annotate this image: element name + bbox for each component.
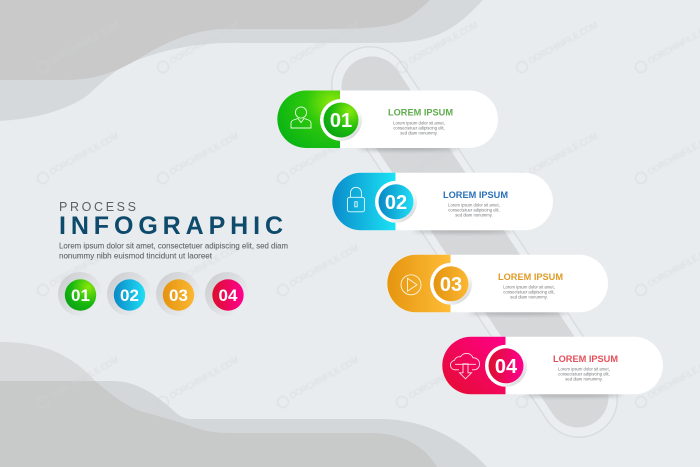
watermarks: OORCHINFILE.COM bbox=[407, 355, 479, 401]
card 1: consectetuer adipiscing elit, bbox=[393, 125, 445, 130]
watermarks: OORCHINFILE.COM bbox=[168, 243, 240, 289]
card 1: 01 bbox=[330, 110, 352, 132]
card 3: Lorem ipsum dolor sit amet, bbox=[503, 285, 555, 290]
card 3: 03 bbox=[440, 274, 462, 296]
icon: padlock bbox=[348, 187, 364, 212]
card 2: 02 bbox=[385, 192, 407, 214]
card 4: LOREM IPSUM bbox=[553, 354, 618, 365]
intro text bbox=[59, 240, 288, 260]
diagonal capsule behind cards bbox=[370, 85, 579, 399]
number badges row: 02 bbox=[120, 286, 139, 305]
watermarks: OORCHINFILE.COM bbox=[168, 20, 240, 66]
number badges row: 04 bbox=[219, 286, 238, 305]
number badges row: 01 bbox=[71, 286, 90, 305]
card 2: Lorem ipsum dolor sit amet, bbox=[448, 203, 500, 208]
card 4 bbox=[442, 337, 663, 396]
card 3: sed diam nonummy. bbox=[510, 295, 548, 300]
watermarks: OORCHINFILE.COM bbox=[407, 131, 479, 177]
watermarks bbox=[38, 20, 700, 408]
top wave shapes bbox=[0, 0, 483, 121]
intro text: Lorem ipsum dolor sit amet, consectetuer adipiscing elit, sed diam bbox=[59, 240, 288, 250]
card 4: Lorem ipsum dolor sit amet, bbox=[558, 367, 610, 372]
card 1: Lorem ipsum dolor sit amet, bbox=[393, 120, 445, 125]
bottom wave shapes bbox=[0, 342, 487, 467]
intro text: nonummy nibh euismod tincidunt ut laoreet bbox=[59, 250, 213, 260]
watermarks: OORCHINFILE.COM bbox=[288, 243, 360, 289]
watermarks: OORCHINFILE.COM bbox=[288, 355, 360, 401]
watermarks: OORCHINFILE.COM bbox=[288, 131, 360, 177]
card 3: consectetuer adipiscing elit, bbox=[503, 290, 555, 295]
watermarks: OORCHINFILE.COM bbox=[527, 355, 599, 401]
number badges row: 03 bbox=[169, 286, 188, 305]
card 3 bbox=[387, 255, 608, 314]
watermarks: OORCHINFILE.COM bbox=[48, 20, 120, 66]
card 1 bbox=[277, 90, 498, 150]
title: PROCESS bbox=[59, 200, 136, 214]
number badges row bbox=[58, 272, 249, 316]
card 3: LOREM IPSUM bbox=[498, 272, 563, 283]
watermarks: OORCHINFILE.COM bbox=[168, 131, 240, 177]
card 1: sed diam nonummy. bbox=[400, 130, 438, 135]
watermarks: OORCHINFILE.COM bbox=[288, 20, 360, 66]
watermarks: OORCHINFILE.COM bbox=[527, 131, 599, 177]
card 1: LOREM IPSUM bbox=[388, 108, 453, 118]
icon: play button bbox=[401, 275, 421, 295]
watermarks: OORCHINFILE.COM bbox=[48, 131, 120, 177]
watermarks: OORCHINFILE.COM bbox=[527, 20, 599, 66]
watermarks: OORCHINFILE.COM bbox=[168, 355, 240, 401]
card 2 bbox=[332, 173, 553, 232]
card 4: 04 bbox=[495, 356, 518, 378]
icon: person bbox=[291, 107, 311, 128]
watermarks: OORCHINFILE.COM bbox=[407, 20, 479, 66]
card 2: LOREM IPSUM bbox=[443, 190, 508, 201]
card 2: consectetuer adipiscing elit, bbox=[448, 208, 500, 213]
watermarks: OORCHINFILE.COM bbox=[48, 355, 120, 401]
watermarks: OORCHINFILE.COM bbox=[48, 243, 120, 289]
title: INFOGRAPHIC bbox=[59, 212, 283, 240]
card 4: consectetuer adipiscing elit, bbox=[558, 372, 610, 377]
card 2: sed diam nonummy. bbox=[455, 213, 493, 218]
icon: cloud download bbox=[450, 353, 480, 379]
card 4: sed diam nonummy. bbox=[565, 377, 603, 382]
